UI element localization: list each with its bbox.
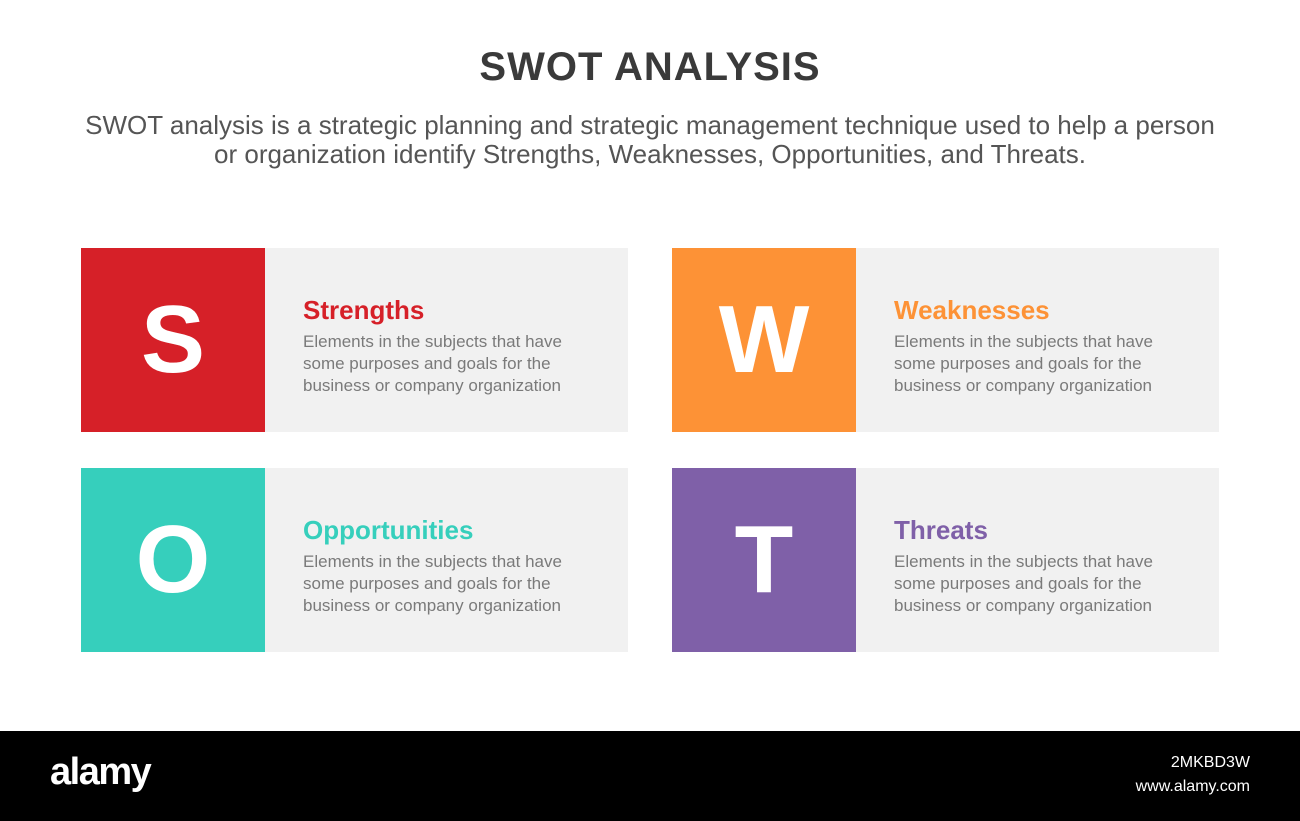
panel: weaknesses <box>672 248 1219 432</box>
image id: www.alamy.com <box>1136 778 1250 795</box>
letter O <box>81 468 265 652</box>
letter S <box>81 248 265 432</box>
text <box>894 552 1153 615</box>
text: Elements in the subjects that have <box>894 332 1153 351</box>
text: some purposes and goals for the <box>894 354 1142 373</box>
letter T <box>672 468 856 652</box>
text <box>894 332 1153 395</box>
text <box>303 332 562 395</box>
image id <box>1136 754 1250 795</box>
footer bar <box>0 731 1300 821</box>
letter T: T <box>735 506 793 613</box>
text: business or company organization <box>894 376 1152 395</box>
logo: alamy <box>50 751 150 793</box>
heading: Strengths <box>303 295 424 325</box>
subtitle: or organization identify Strengths, Weaknesses, Opportunities, and Threats. <box>214 139 1086 169</box>
letter W: W <box>719 286 809 393</box>
image id: 2MKBD3W <box>1171 754 1250 771</box>
letter O: O <box>136 506 210 613</box>
subtitle: SWOT analysis is a strategic planning and strategic management technique used to help a person <box>85 110 1215 140</box>
text: Elements in the subjects that have <box>303 552 562 571</box>
panel: opportunities <box>81 468 628 652</box>
panel: threats <box>672 468 1219 652</box>
title: SWOT ANALYSIS <box>479 45 821 89</box>
text <box>303 552 562 615</box>
text: some purposes and goals for the <box>303 574 551 593</box>
text: business or company organization <box>894 596 1152 615</box>
heading: Weaknesses <box>894 295 1050 325</box>
text: Elements in the subjects that have <box>894 552 1153 571</box>
text: some purposes and goals for the <box>894 574 1142 593</box>
text: some purposes and goals for the <box>303 354 551 373</box>
subtitle <box>85 110 1215 169</box>
letter W <box>672 248 856 432</box>
letter S: S <box>141 286 205 393</box>
panel: strengths <box>81 248 628 432</box>
heading: Threats <box>894 515 988 545</box>
heading: Opportunities <box>303 515 473 545</box>
text: business or company organization <box>303 596 561 615</box>
text: Elements in the subjects that have <box>303 332 562 351</box>
text: business or company organization <box>303 376 561 395</box>
